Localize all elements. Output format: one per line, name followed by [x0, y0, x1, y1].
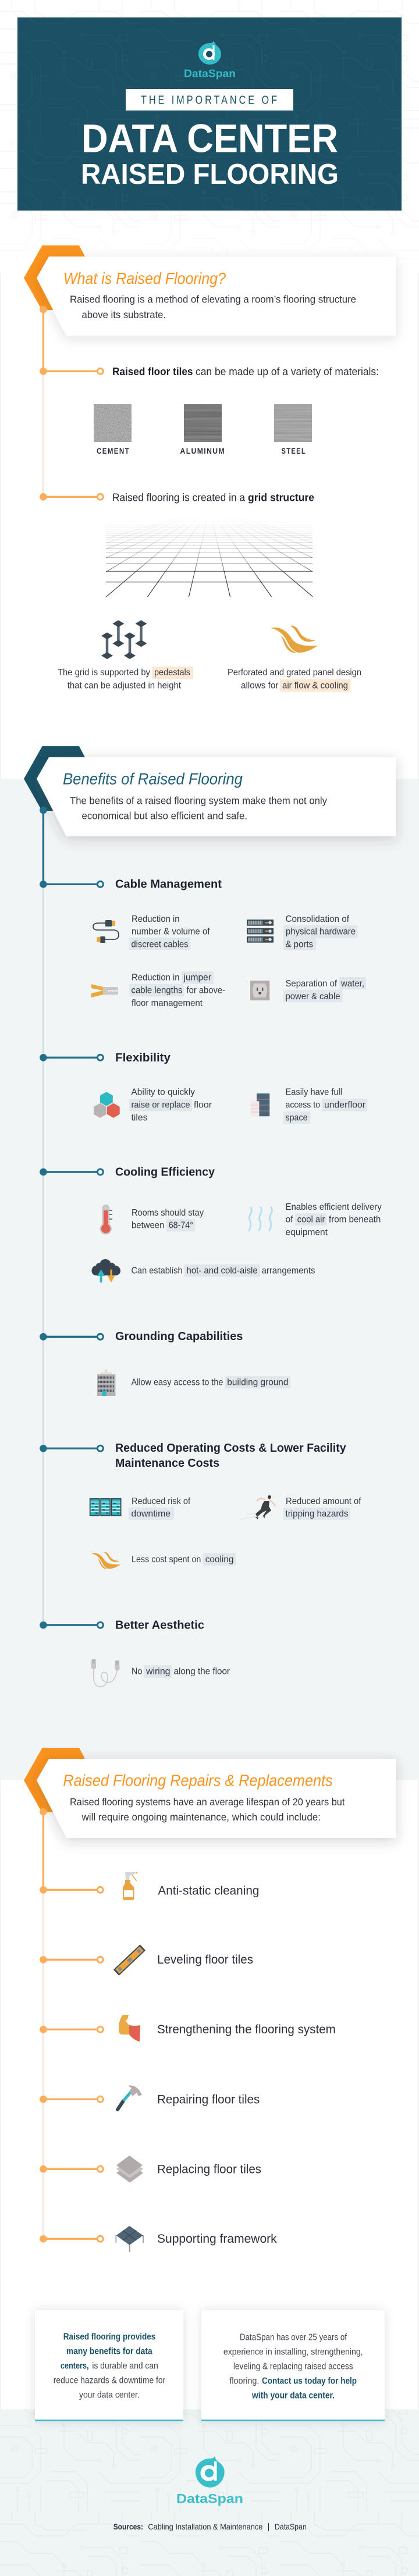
text: grid structure: Raised flooring is created in a [112, 491, 246, 504]
text: no wiring: along the floor [173, 1666, 230, 1676]
card text: Raised flooring provides [63, 2332, 155, 2342]
heading: What is Raised Flooring? [63, 269, 226, 287]
title [81, 116, 339, 190]
icon: spray bottle [123, 1872, 137, 1900]
intro text [70, 294, 356, 320]
material: cement [94, 404, 132, 455]
text: no wiring [132, 1665, 230, 1678]
text: jumper cable lengths [129, 971, 225, 1009]
text: cooling cost: Less cost spent on [132, 1555, 201, 1565]
card text [54, 2332, 165, 2400]
text: raise or replace [129, 1088, 212, 1123]
text: cool air: Enables efficient delivery [285, 1202, 382, 1212]
text: tripping hazards [283, 1497, 361, 1520]
caption: air flow: Perforated and grated panel design [228, 668, 361, 678]
heading panel [37, 1759, 396, 1838]
text: room temperature [132, 1208, 204, 1231]
connector: better aesthetic [40, 1622, 103, 1629]
text: cooling cost: cooling [205, 1555, 233, 1565]
text: hot and cold aisle: Can establish [132, 1266, 183, 1275]
text: water, power and cable: Separation of [285, 979, 338, 989]
icon: cool air waves [249, 1207, 272, 1231]
sources: Sources: [113, 2522, 143, 2531]
icon: pedestals [101, 620, 147, 659]
icon: crimper [91, 984, 118, 997]
text: no wiring: No [132, 1666, 142, 1676]
card text: flooring. [229, 2376, 259, 2386]
heading: reduced operating costs: Maintenance Costs [115, 1456, 219, 1470]
text: cool air [285, 1202, 382, 1237]
icon: framework [116, 2226, 143, 2252]
material: aluminum [180, 404, 225, 455]
text: raise or replace: floor [194, 1100, 212, 1110]
logo: DataSpan footer: DataSpan [176, 2491, 243, 2506]
icon: air flow small [91, 1552, 121, 1569]
text: room temperature: Rooms should stay [132, 1208, 204, 1218]
caption: pedestals [58, 667, 193, 690]
icon: hot and cold cloud [92, 1259, 120, 1282]
timeline 2 [40, 807, 47, 1625]
intro text: economical but also efficient and safe. [81, 810, 247, 821]
text: replacing floor tiles: Replacing floor tiles [157, 2163, 261, 2176]
text: tripping hazards: Reduced amount of [286, 1497, 361, 1506]
card text [223, 2332, 363, 2400]
logo: DataSpan header [184, 41, 236, 80]
text: water, power and cable: water, [340, 979, 364, 989]
intro text: will require ongoing maintenance, which could include: [81, 1811, 321, 1823]
text: hot and cold aisle: hot- and cold-aisle [186, 1266, 258, 1275]
text: anti-static cleaning: Anti-static cleaning [158, 1884, 259, 1897]
heading panel [37, 256, 396, 336]
text: underfloor space: Easily have full [285, 1088, 342, 1098]
text: cool air: of [285, 1215, 293, 1225]
caption: air flow: allows for [241, 680, 279, 690]
card text: reduce hazards & downtime for [54, 2376, 165, 2386]
text: discreet cables: Reduction in [132, 914, 179, 924]
text: jumper cable lengths: jumper [183, 973, 212, 983]
heading panel [37, 757, 396, 836]
card text: with your data center. [251, 2390, 335, 2400]
text: jumper cable lengths: cable lengths [132, 986, 183, 996]
text: jumper cable lengths: Reduction in [132, 973, 179, 983]
text: raise or replace: Ability to quickly [132, 1088, 195, 1098]
caption: pedestals: The grid is supported by [58, 668, 150, 678]
text: jumper cable lengths: floor management [132, 999, 203, 1009]
icon: hammer [118, 2086, 142, 2110]
connector: flexibility [40, 1054, 103, 1061]
title: DATA CENTER [81, 116, 338, 161]
header background: circuit pattern [0, 0, 419, 273]
connector: grid [40, 493, 103, 501]
caption: air flow: air flow & cooling [282, 680, 348, 690]
text: hot and cold aisle [132, 1264, 315, 1277]
text: building ground: building ground [227, 1378, 288, 1388]
text: discreet cables: number & volume of [132, 927, 210, 937]
logo: DataSpan footer [176, 2456, 243, 2506]
icon: server racks [90, 1498, 121, 1516]
text: cool air: cool air [297, 1215, 325, 1225]
caption: pedestals: pedestals [154, 668, 190, 678]
intro text: The benefits of a raised flooring system make them not only [70, 794, 327, 806]
icon: cable [93, 920, 119, 943]
text: water, power and cable: power & cable [285, 992, 340, 1002]
text: building ground [132, 1376, 290, 1388]
text: raise or replace: raise or replace [132, 1100, 190, 1110]
icon: outlet [250, 981, 269, 1000]
material: cement: CEMENT [97, 447, 130, 455]
heading: reduced operating costs [115, 1441, 346, 1470]
connector: repairing [40, 2096, 103, 2103]
connector: cooling efficiency [40, 1168, 103, 1175]
material: aluminum: ALUMINUM [180, 447, 225, 455]
connector: cable management [40, 881, 103, 888]
panel: title banner [17, 17, 402, 211]
icon: air flow [271, 626, 318, 653]
footer background: circuit pattern [0, 2409, 419, 2576]
hexagon bracket [24, 1748, 85, 1812]
icon: building [97, 1370, 115, 1396]
text: physical hardware: physical hardware [286, 927, 356, 937]
icon: tripping man [240, 1495, 275, 1519]
text: raised floor tiles: Raised floor tiles [112, 365, 193, 377]
card text: Contact us today for help [262, 2376, 357, 2386]
text: room temperature: 68-74° [169, 1221, 193, 1231]
intro text [70, 1796, 345, 1823]
text: grid structure: grid structure [248, 491, 314, 504]
text: downtime [129, 1497, 190, 1520]
text: underfloor space: space [285, 1113, 308, 1123]
caption: air flow [228, 668, 361, 692]
section: What is Raised Flooring [24, 245, 396, 336]
heading: flexibility: Flexibility [115, 1051, 171, 1064]
text: physical hardware: Consolidation of [285, 914, 350, 924]
text: water, power and cable [283, 977, 366, 1002]
text: raised floor tiles [112, 365, 379, 377]
text: building ground: Allow easy access to the [132, 1378, 223, 1388]
heading: cooling efficiency: Cooling Efficiency [115, 1166, 215, 1179]
text: room temperature: between [132, 1221, 164, 1231]
connector: strengthening [40, 2026, 103, 2033]
subtitle box [126, 89, 293, 111]
caption: pedestals: that can be adjusted in height [68, 680, 182, 690]
heading: Benefits of Raised Flooring [63, 769, 243, 788]
icon: flexed arm [119, 2015, 140, 2041]
connector: tiles [40, 368, 103, 375]
title: RAISED FLOORING [81, 158, 339, 190]
intro text: above its substrate. [81, 309, 166, 320]
connector: leveling [40, 1956, 103, 1964]
text: physical hardware [283, 914, 357, 950]
connector: grounding [40, 1333, 103, 1341]
subtitle box: THE IMPORTANCE OF [141, 93, 279, 106]
hexagon bracket [24, 245, 85, 310]
section: Benefits of Raised Flooring [24, 746, 396, 836]
intro text: Raised flooring is a method of elevating a room’s flooring structure [70, 294, 356, 305]
icon: hexagon tiles [94, 1092, 120, 1118]
card text: DataSpan has over 25 years of [240, 2332, 347, 2342]
text: discreet cables [129, 914, 210, 950]
sources: DataSpan [275, 2522, 307, 2531]
text: no wiring: wiring [145, 1666, 170, 1676]
text: underfloor space [283, 1088, 367, 1124]
heading: cable management: Cable Management [115, 878, 222, 891]
logo: DataSpan header: DataSpan [184, 68, 236, 80]
text: strengthening: Strengthening the flooring system [157, 2023, 336, 2036]
text: physical hardware: & ports [285, 939, 313, 949]
card text: centers, [61, 2361, 88, 2371]
text: repairing floor tiles: Repairing floor tiles [157, 2093, 260, 2107]
text: discreet cables: discreet cables [132, 939, 189, 949]
text: hot and cold aisle: arrangements [262, 1266, 315, 1275]
section background: benefits [0, 779, 419, 1780]
icon: underfloor stack [251, 1093, 269, 1116]
heading: better aesthetic: Better Aesthetic [115, 1618, 204, 1632]
card: benefits summary [35, 2310, 183, 2421]
material: steel [274, 404, 312, 455]
timeline 1 [40, 306, 47, 497]
text: jumper cable lengths: for above- [186, 986, 225, 996]
text: tripping hazards: tripping hazards [285, 1509, 348, 1519]
card text: leveling & replacing raised access [233, 2361, 353, 2371]
icon: level [113, 1944, 145, 1976]
card text: is durable and can [92, 2361, 158, 2371]
section: Repairs and Replacements [24, 1748, 396, 1838]
text: raised floor tiles: can be made up of a variety of materials: [196, 365, 379, 377]
connector: framework [40, 2235, 103, 2243]
card text: many benefits for data [66, 2347, 152, 2357]
icon: thermometer [100, 1205, 112, 1235]
connector: replacing [40, 2165, 103, 2173]
heading: Raised Flooring Repairs & Replacements [63, 1772, 333, 1790]
text: leveling floor tiles: Leveling floor tiles [157, 1953, 253, 1966]
material: steel: STEEL [282, 447, 306, 455]
sources [113, 2522, 307, 2531]
heading: grounding capabilities: Grounding Capabilities [115, 1330, 243, 1343]
connector: reduced costs [40, 1445, 103, 1452]
icon: servers [247, 920, 274, 943]
text: cool air: from beneath [329, 1215, 381, 1225]
icon: usb cable [91, 1659, 120, 1687]
sources: Cabling Installation & Maintenance [148, 2522, 263, 2531]
intro text: Raised flooring systems have an average lifespan of 20 years but [70, 1796, 345, 1808]
intro text [70, 794, 327, 821]
text: underfloor space: underfloor [324, 1100, 366, 1110]
text: downtime: Reduced risk of [132, 1497, 190, 1506]
text: cooling cost [132, 1553, 236, 1566]
card: contact [201, 2310, 385, 2421]
text: downtime: downtime [132, 1509, 171, 1519]
perspective grid [106, 524, 313, 597]
text: cool air: equipment [285, 1227, 328, 1237]
icon: stacked tiles [116, 2155, 143, 2183]
connector: cleaning [40, 1886, 103, 1894]
text: underfloor space: access to [285, 1100, 320, 1110]
text: raise or replace: tiles [132, 1113, 148, 1123]
text: supporting framework: Supporting framework [157, 2232, 277, 2246]
hexagon bracket [24, 746, 85, 811]
card text: experience in installing, strengthening, [223, 2347, 363, 2357]
heading: reduced operating costs: Reduced Operating Costs & Lower Facility [115, 1441, 346, 1455]
timeline 3 [40, 1808, 47, 2239]
card text: your data center. [79, 2390, 140, 2400]
